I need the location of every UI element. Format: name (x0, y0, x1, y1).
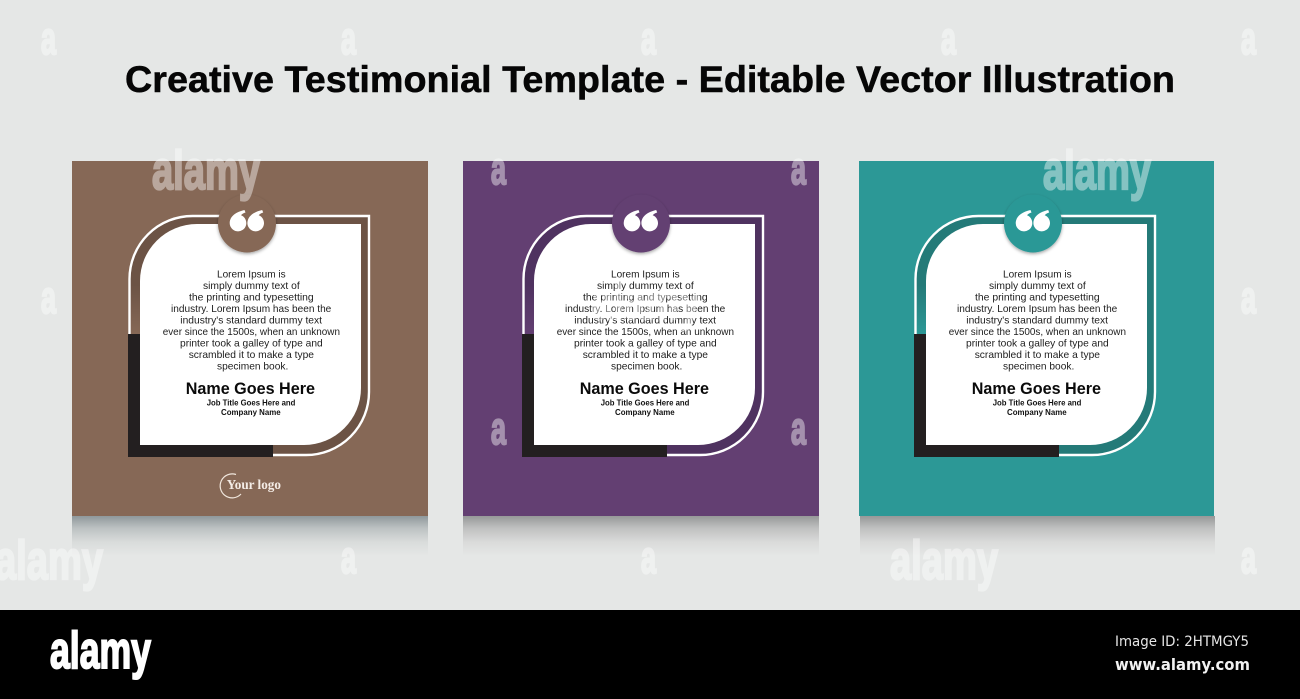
watermark row: top: a (941, 13, 957, 64)
testimonial body text: the printing and typesetting (975, 292, 1100, 304)
testimonial body text: industry. Lorem Ipsum has been the (957, 303, 1117, 315)
testimonial body text: Lorem Ipsum is (217, 268, 286, 280)
reflection: teal panel (860, 516, 1215, 556)
job title (601, 398, 689, 417)
testimonial body text: scrambled it to make a type (975, 349, 1100, 361)
testimonial body text: Lorem Ipsum is (1003, 268, 1072, 280)
website: www.alamy.com (1115, 655, 1250, 674)
footer logo: alamy (50, 622, 151, 680)
testimonial body text: the printing and typesetting (583, 292, 708, 304)
watermarks: small repeated marks: a (491, 143, 507, 194)
testimonial body text: industry's standard dummy text (966, 314, 1108, 326)
testimonial body text (557, 268, 734, 372)
watermarks: small repeated marks: a (341, 532, 357, 583)
quote frame (128, 216, 369, 457)
logo arc (220, 474, 241, 498)
testimonial body text: ever since the 1500s, when an unknown (949, 326, 1126, 338)
watermark row: top (41, 13, 1257, 64)
shaded band (916, 216, 1155, 455)
logo placeholder (220, 474, 281, 498)
job title: Job Title Goes Here and (207, 398, 295, 408)
testimonial body text: simply dummy text of (989, 280, 1086, 292)
title: Creative Testimonial Template - Editable Vector Illustration (125, 58, 1175, 100)
testimonial body text: printer took a galley of type and (180, 338, 323, 350)
icon: quotation marks (230, 210, 264, 231)
testimonial body text: printer took a galley of type and (574, 338, 717, 350)
job title: Company Name (1007, 407, 1067, 417)
testimonial body text: industry's standard dummy text (180, 314, 322, 326)
band fade on left edge (524, 285, 534, 334)
image id: Image ID: 2HTMGY5 (1115, 634, 1249, 650)
badge circle (218, 194, 276, 252)
icon: quotation marks (624, 210, 658, 231)
badge circle (1004, 194, 1062, 252)
reflection: brown panel (72, 516, 428, 556)
white content box (534, 224, 755, 445)
watermarks: small repeated marks: a (41, 272, 57, 323)
watermarks: small repeated marks: a (641, 532, 657, 583)
testimonial body text: ever since the 1500s, when an unknown (557, 326, 734, 338)
white content box (926, 224, 1147, 445)
watermarks: large repeated marks: alamy (592, 269, 700, 331)
shaded band (130, 216, 369, 455)
watermarks: large repeated marks (0, 139, 1151, 591)
name: Name Goes Here (186, 379, 315, 398)
footer background (0, 610, 1300, 699)
testimonial body text: industry's standard dummy text (574, 314, 716, 326)
testimonial body text: the printing and typesetting (189, 292, 314, 304)
panel: teal testimonial card (859, 161, 1214, 516)
watermarks: small repeated marks: a (1241, 532, 1257, 583)
watermarks: large repeated marks: alamy (890, 529, 998, 591)
footer bar (0, 610, 1300, 699)
watermarks: small repeated marks: a (491, 403, 507, 454)
testimonial body text: ever since the 1500s, when an unknown (163, 326, 340, 338)
testimonial body text: printer took a galley of type and (966, 338, 1109, 350)
job title (207, 398, 295, 417)
testimonial body text: industry. Lorem Ipsum has been the (171, 303, 331, 315)
watermark row: top: a (341, 13, 357, 64)
band fade on left edge (130, 285, 140, 334)
white outline (524, 216, 763, 455)
testimonial body text: specimen book. (217, 360, 288, 372)
white content box (140, 224, 361, 445)
panel: brown testimonial card (72, 161, 428, 516)
watermarks: large repeated marks: alamy (1043, 139, 1151, 201)
quote frame (522, 216, 763, 457)
watermarks: small repeated marks (41, 143, 1257, 583)
watermark row: top: a (41, 13, 57, 64)
icon: quotation marks (1016, 210, 1050, 231)
watermarks: small repeated marks: a (791, 143, 807, 194)
job title: Job Title Goes Here and (601, 398, 689, 408)
logo text: Your logo (227, 477, 281, 492)
band fade on left edge (916, 285, 926, 334)
watermarks: large repeated marks: alamy (152, 139, 260, 201)
watermarks: small repeated marks: a (791, 403, 807, 454)
testimonial body text (163, 268, 340, 372)
job title: Company Name (615, 407, 675, 417)
watermark row: top: a (641, 13, 657, 64)
card background (463, 161, 819, 516)
quote badge (612, 194, 670, 252)
testimonial body text: Lorem Ipsum is (611, 268, 680, 280)
testimonial body text: simply dummy text of (203, 280, 300, 292)
job title (993, 398, 1081, 417)
testimonial body text (949, 268, 1126, 372)
testimonial body text: industry. Lorem Ipsum has been the (565, 303, 725, 315)
white outline (130, 216, 369, 455)
black corner bracket (128, 334, 273, 457)
name: Name Goes Here (972, 379, 1101, 398)
black corner bracket (522, 334, 667, 457)
job title: Job Title Goes Here and (993, 398, 1081, 408)
quote frame (914, 216, 1155, 457)
testimonial body text: specimen book. (611, 360, 682, 372)
card background (72, 161, 428, 516)
card background (859, 161, 1214, 516)
quote badge (1004, 194, 1062, 252)
job title: Company Name (221, 407, 281, 417)
testimonial body text: scrambled it to make a type (189, 349, 314, 361)
badge circle (612, 194, 670, 252)
panel: purple testimonial card (463, 161, 819, 516)
shaded band (524, 216, 763, 455)
reflection: purple panel (463, 516, 819, 556)
watermark row: top: a (1241, 13, 1257, 64)
testimonial body text: simply dummy text of (597, 280, 694, 292)
testimonial body text: specimen book. (1003, 360, 1074, 372)
name: Name Goes Here (580, 379, 709, 398)
testimonial body text: scrambled it to make a type (583, 349, 708, 361)
watermarks: small repeated marks: a (1241, 272, 1257, 323)
white outline (916, 216, 1155, 455)
quote badge (218, 194, 276, 252)
black corner bracket (914, 334, 1059, 457)
